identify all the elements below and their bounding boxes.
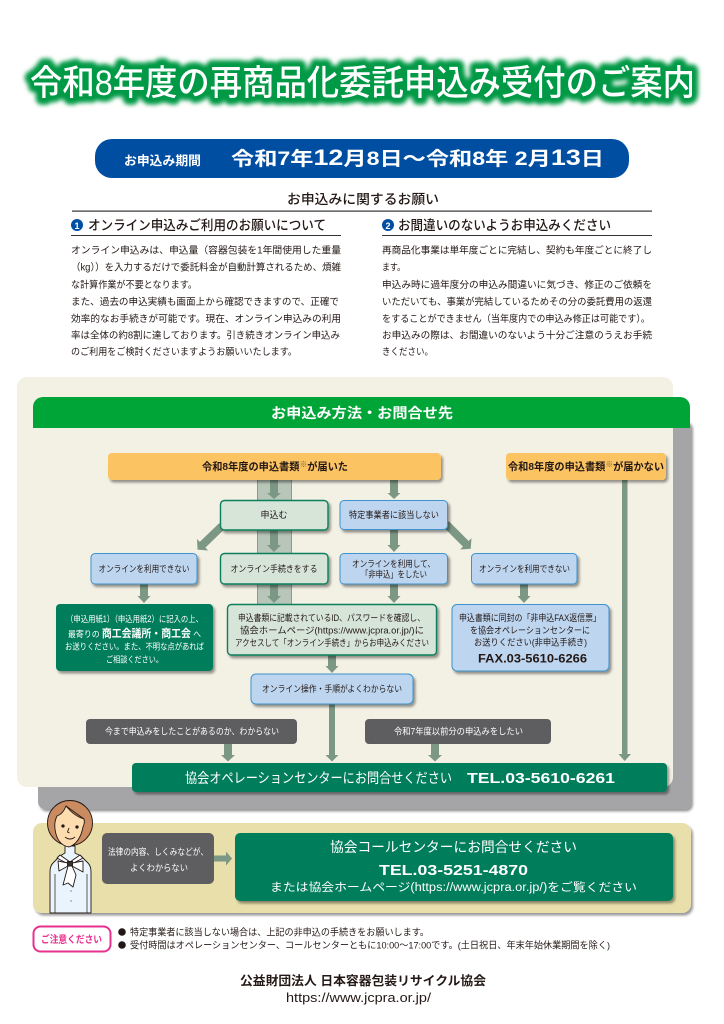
orange box: documents arrived: ※: [299, 460, 307, 469]
section 2 body text: 再商品化事業は単年度ごとに完結し、契約も年度ごとに終了し: [382, 244, 652, 256]
box: chamber of commerce: [56, 604, 213, 671]
section 1 body text: [71, 244, 341, 358]
footer: organization: https://www.jcpra.or.jp/: [286, 991, 432, 1005]
icon: woman in blouse: [48, 800, 92, 913]
section 2 body text: ます。: [382, 262, 405, 274]
section 2 body text: をすることができません（当年度内での申込み修正は可能です）。: [382, 312, 650, 325]
box: law unclear: [102, 833, 214, 884]
section 1 body text: 率は全体の約8割に達しております。引き続きオンライン申込み: [71, 328, 340, 342]
orange box: documents arrived: 令和8年度の申込書類: [202, 461, 302, 473]
box: not a specified business: [340, 500, 448, 530]
box: not a specified business: 特定事業者に該当しない: [349, 509, 439, 520]
central pale column: [258, 478, 292, 606]
section 2 body text: 申込み時に過年度分の申込み間違いに気づき、修正のご依頼を: [382, 278, 652, 291]
box: law unclear: 法律の内容、しくみなどが、: [108, 846, 208, 857]
operation center contact bar: 協会オペレーションセンターにお問合せください: [185, 770, 452, 786]
box: call center contact: TEL.03-5251-4870: [379, 862, 528, 879]
section 1 body text: （kg））を入力するだけで委託料金が自動計算されるため、煩雑: [71, 260, 341, 274]
notes: 特定事業者に該当しない場合は、上記の非申込の手続きをお願いします。: [130, 926, 429, 938]
orange box: documents arrived: が届いた: [307, 460, 348, 473]
box: cannot use online (left): オンラインを利用できない: [98, 563, 190, 574]
section 2 body text: きください。: [382, 346, 433, 358]
box: online procedure instructions: [228, 604, 436, 655]
callout: please note: ご注意ください: [41, 933, 102, 946]
section 2 number icon: 2: [385, 221, 391, 231]
operation center contact bar: TEL.03-5610-6261: [467, 770, 615, 787]
section 1 body text: また、過去の申込実績も画面上から確認できますので、正確で: [71, 295, 339, 308]
section 1 number icon: 1: [74, 221, 80, 231]
arrow to call center: [214, 852, 232, 866]
section 2 body text: [382, 244, 652, 358]
application period banner: [95, 139, 629, 178]
section 1 body text: 効率的なお手続きが可能です。現在、オンライン申込みの利用: [71, 312, 341, 325]
box: apply: 申込む: [260, 509, 288, 520]
box: law unclear: よくわからない: [130, 863, 188, 873]
panel header: [33, 397, 690, 428]
orange box: documents arrived: [108, 453, 441, 480]
box: non-application online: 「非申込」をしたい: [361, 568, 427, 580]
box: online procedure instructions: 申込書類に記載されているID、パスワードを確認し、: [238, 612, 425, 623]
box: unsure about past application: 今まで申込みをしたことがあるのか、わからない: [105, 726, 279, 736]
box: chamber of commerce: ご相談ください。: [106, 654, 163, 664]
box: online operation unclear: オンライン操作・手順がよくわからない: [262, 683, 402, 694]
section 1 heading: オンライン申込みご利用のお願いについて: [88, 217, 326, 233]
section 2 body text: いただいても、事業が完結しているためその分の委託費用の返還: [382, 295, 652, 308]
box: apply for earlier years: [365, 719, 551, 744]
box: do online procedure: [220, 554, 328, 584]
section 2 heading: お間違いのないようお申込みください: [398, 218, 611, 233]
orange box: documents not arrived: [506, 453, 666, 480]
box: online procedure instructions: 協会ホームページ(https://www.jcpra.or.jp/)に: [240, 624, 424, 636]
box: call center contact: または協会ホームページ(https://www.jcpra.or.jp/)をご覧ください: [270, 880, 637, 894]
requests heading: お申込みに関するお願い: [287, 192, 439, 207]
box: call center contact: [235, 833, 673, 901]
box: cannot use online (left): [91, 554, 197, 584]
box: non-application FAX: [452, 604, 609, 671]
panel header: お申込み方法・お問合せ先: [271, 405, 453, 421]
box: online procedure instructions: アクセスして「オンライン手続き」からお申込みください: [235, 637, 429, 648]
box: non-application FAX: を協会オペレーションセンターに: [470, 624, 590, 636]
panel: call center: [33, 823, 691, 913]
period label: お申込み期間: [124, 153, 201, 168]
box: chamber of commerce: 最寄りの 商工会議所・商工会 へ: [68, 626, 201, 640]
footer: organization: 公益財団法人 日本容器包装リサイクル協会: [240, 973, 487, 988]
section 1 body text: な計算作業が不要となります。: [71, 278, 197, 291]
section 2: avoid mistakes: [382, 218, 652, 358]
box: non-application FAX: 申込書類に同封の「非申込FAX返信票」: [459, 612, 601, 623]
operation center contact bar: [132, 763, 667, 792]
section 1 body text: オンライン申込みは、申込量（容器包装を1年間使用した重量: [71, 244, 341, 256]
footer: organization: [240, 973, 487, 1005]
box: apply: [220, 500, 328, 530]
period dates: 令和7年 12 月8日～令和8年 2月 13 日: [231, 145, 604, 170]
box: cannot use online (right): オンラインを利用できない: [479, 563, 570, 574]
box: non-application FAX: FAX.03-5610-6266: [478, 654, 587, 666]
box: call center contact: 協会コールセンターにお問合せください: [330, 839, 577, 855]
box: non-application online: [340, 554, 448, 584]
panel shadow: [38, 420, 691, 809]
callout: please note: [34, 926, 110, 952]
box: non-application FAX: お送りください(非申込手続き): [474, 636, 587, 648]
section 1: online application: [71, 217, 341, 358]
box: apply for earlier years: 令和7年度以前分の申込みをしたい: [394, 726, 523, 736]
box: unsure about past application: [86, 719, 297, 744]
arrows: [138, 480, 631, 762]
section 1 number icon: [71, 219, 83, 231]
box: cannot use online (right): [472, 554, 577, 584]
box: non-application online: オンラインを利用して、: [352, 558, 435, 569]
orange box: documents not arrived: が届かない: [613, 460, 664, 473]
box: chamber of commerce: （申込用紙1）（申込用紙2）に記入の上、: [66, 613, 203, 624]
orange box: documents not arrived: 令和8年度の申込書類: [508, 461, 608, 473]
section 1 body text: のご利用をご検討くださいますようお願いいたします。: [71, 345, 297, 358]
notes: [118, 926, 610, 952]
section 2 body text: お申込みの際は、お間違いのないよう十分ご注意のうえお手続: [382, 328, 652, 342]
orange box: documents not arrived: ※: [605, 460, 613, 469]
panel: how to apply: [17, 377, 690, 787]
section 2 number icon: [382, 219, 394, 231]
notes: 受付時間はオペレーションセンター、コールセンターともに10:00～17:00です。(土日祝日、年末年始休業期間を除く): [130, 940, 610, 952]
box: do online procedure: オンライン手続きをする: [230, 563, 318, 574]
box: online operation unclear: [251, 674, 413, 704]
box: chamber of commerce: お送りください。また、不明な点があれば: [65, 640, 204, 652]
